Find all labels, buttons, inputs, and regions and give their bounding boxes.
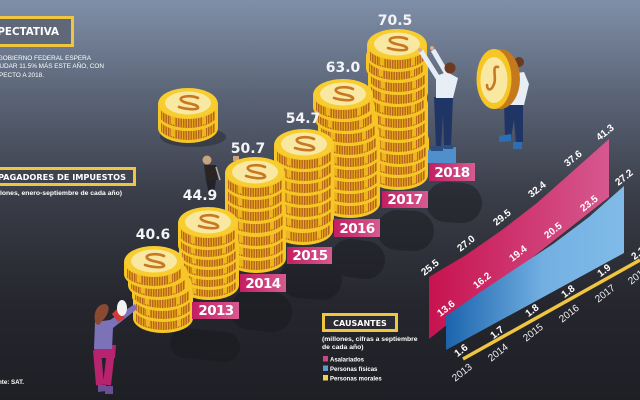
legend items: Personas morales bbox=[330, 376, 382, 382]
stack values: 44.9 bbox=[183, 188, 217, 204]
asalariados values: 25.5 bbox=[419, 257, 442, 278]
years axis: 2016 bbox=[557, 303, 582, 325]
morales values: 1.8 bbox=[560, 283, 578, 301]
morales values bbox=[453, 245, 640, 360]
asalariados values: 32.4 bbox=[526, 179, 549, 200]
band: asalariados bbox=[429, 139, 609, 339]
coin stack 50.7 bbox=[225, 157, 286, 273]
year tags: 2017 bbox=[387, 192, 423, 208]
legend items bbox=[323, 356, 382, 382]
year tags: 2015 bbox=[292, 248, 328, 264]
year tags: 2016 bbox=[339, 221, 375, 237]
coin stack 54.7 bbox=[273, 129, 334, 245]
small person bbox=[202, 156, 239, 194]
fisicas values: 20.5 bbox=[542, 220, 565, 241]
stack shadows bbox=[185, 202, 462, 347]
stack values bbox=[136, 13, 412, 243]
years axis: 2015 bbox=[521, 322, 546, 344]
single coin pile bbox=[158, 88, 226, 147]
legend heading: CAUSANTES bbox=[333, 319, 387, 328]
asalariados values: 29.5 bbox=[491, 207, 514, 228]
stack values: 63.0 bbox=[326, 60, 361, 76]
heading: pagadores de impuestos bbox=[0, 168, 134, 184]
man on box bbox=[418, 46, 458, 163]
fisicas values: 13.6 bbox=[435, 298, 458, 319]
fisicas values: 19.4 bbox=[507, 243, 530, 264]
years axis: 2013 bbox=[450, 362, 475, 384]
fisicas values: 16.2 bbox=[471, 270, 494, 291]
man carrying coin bbox=[476, 49, 529, 149]
fisicas values: 27.2 bbox=[613, 167, 636, 188]
morales values: 1.8 bbox=[524, 302, 542, 320]
coin stack 44.9 bbox=[178, 207, 239, 300]
fisicas values: 23.5 bbox=[578, 193, 601, 214]
asalariados values: 41.3 bbox=[594, 122, 617, 143]
stack values: 50.7 bbox=[231, 141, 265, 157]
heading: pagadores de impuestos: PAGADORES DE IMPUESTOS bbox=[0, 172, 126, 182]
legend note bbox=[322, 336, 418, 351]
morales values: 1.7 bbox=[489, 324, 507, 342]
stack values: 54.7 bbox=[286, 111, 320, 127]
band: personas físicas bbox=[446, 186, 624, 350]
legend note: de cada año) bbox=[322, 344, 364, 351]
morales values: 1.6 bbox=[453, 342, 471, 360]
coin stack 63.0 bbox=[313, 79, 380, 218]
year tags: 2014 bbox=[245, 276, 281, 292]
legend items: Asalariados bbox=[330, 358, 365, 364]
stack values: 40.6 bbox=[136, 227, 170, 243]
asalariados values bbox=[419, 122, 617, 278]
coin stack 70.5 bbox=[366, 29, 429, 190]
coin stack 40.6 bbox=[124, 246, 193, 333]
legend items: Personas físicas bbox=[330, 367, 378, 373]
heading: expectativa bbox=[0, 18, 72, 46]
area chart bbox=[419, 122, 640, 384]
legend note: (millones, cifras a septiembre bbox=[322, 336, 418, 343]
fisicas values bbox=[435, 167, 636, 319]
year tags: 2013 bbox=[198, 303, 234, 319]
legend: causantes bbox=[322, 314, 418, 382]
band: personas morales bbox=[463, 260, 640, 359]
year tags: 2018 bbox=[434, 165, 470, 181]
woman with megaphone bbox=[94, 300, 137, 394]
year tags bbox=[192, 163, 475, 319]
years axis bbox=[450, 265, 640, 384]
years axis: 2017 bbox=[593, 283, 618, 305]
asalariados values: 37.6 bbox=[562, 148, 585, 169]
stack values: 70.5 bbox=[378, 13, 412, 29]
asalariados values: 27.0 bbox=[455, 233, 478, 254]
text block: expectativa bbox=[0, 55, 104, 79]
years axis: 2014 bbox=[486, 342, 511, 364]
morales values: 1.9 bbox=[596, 262, 614, 280]
